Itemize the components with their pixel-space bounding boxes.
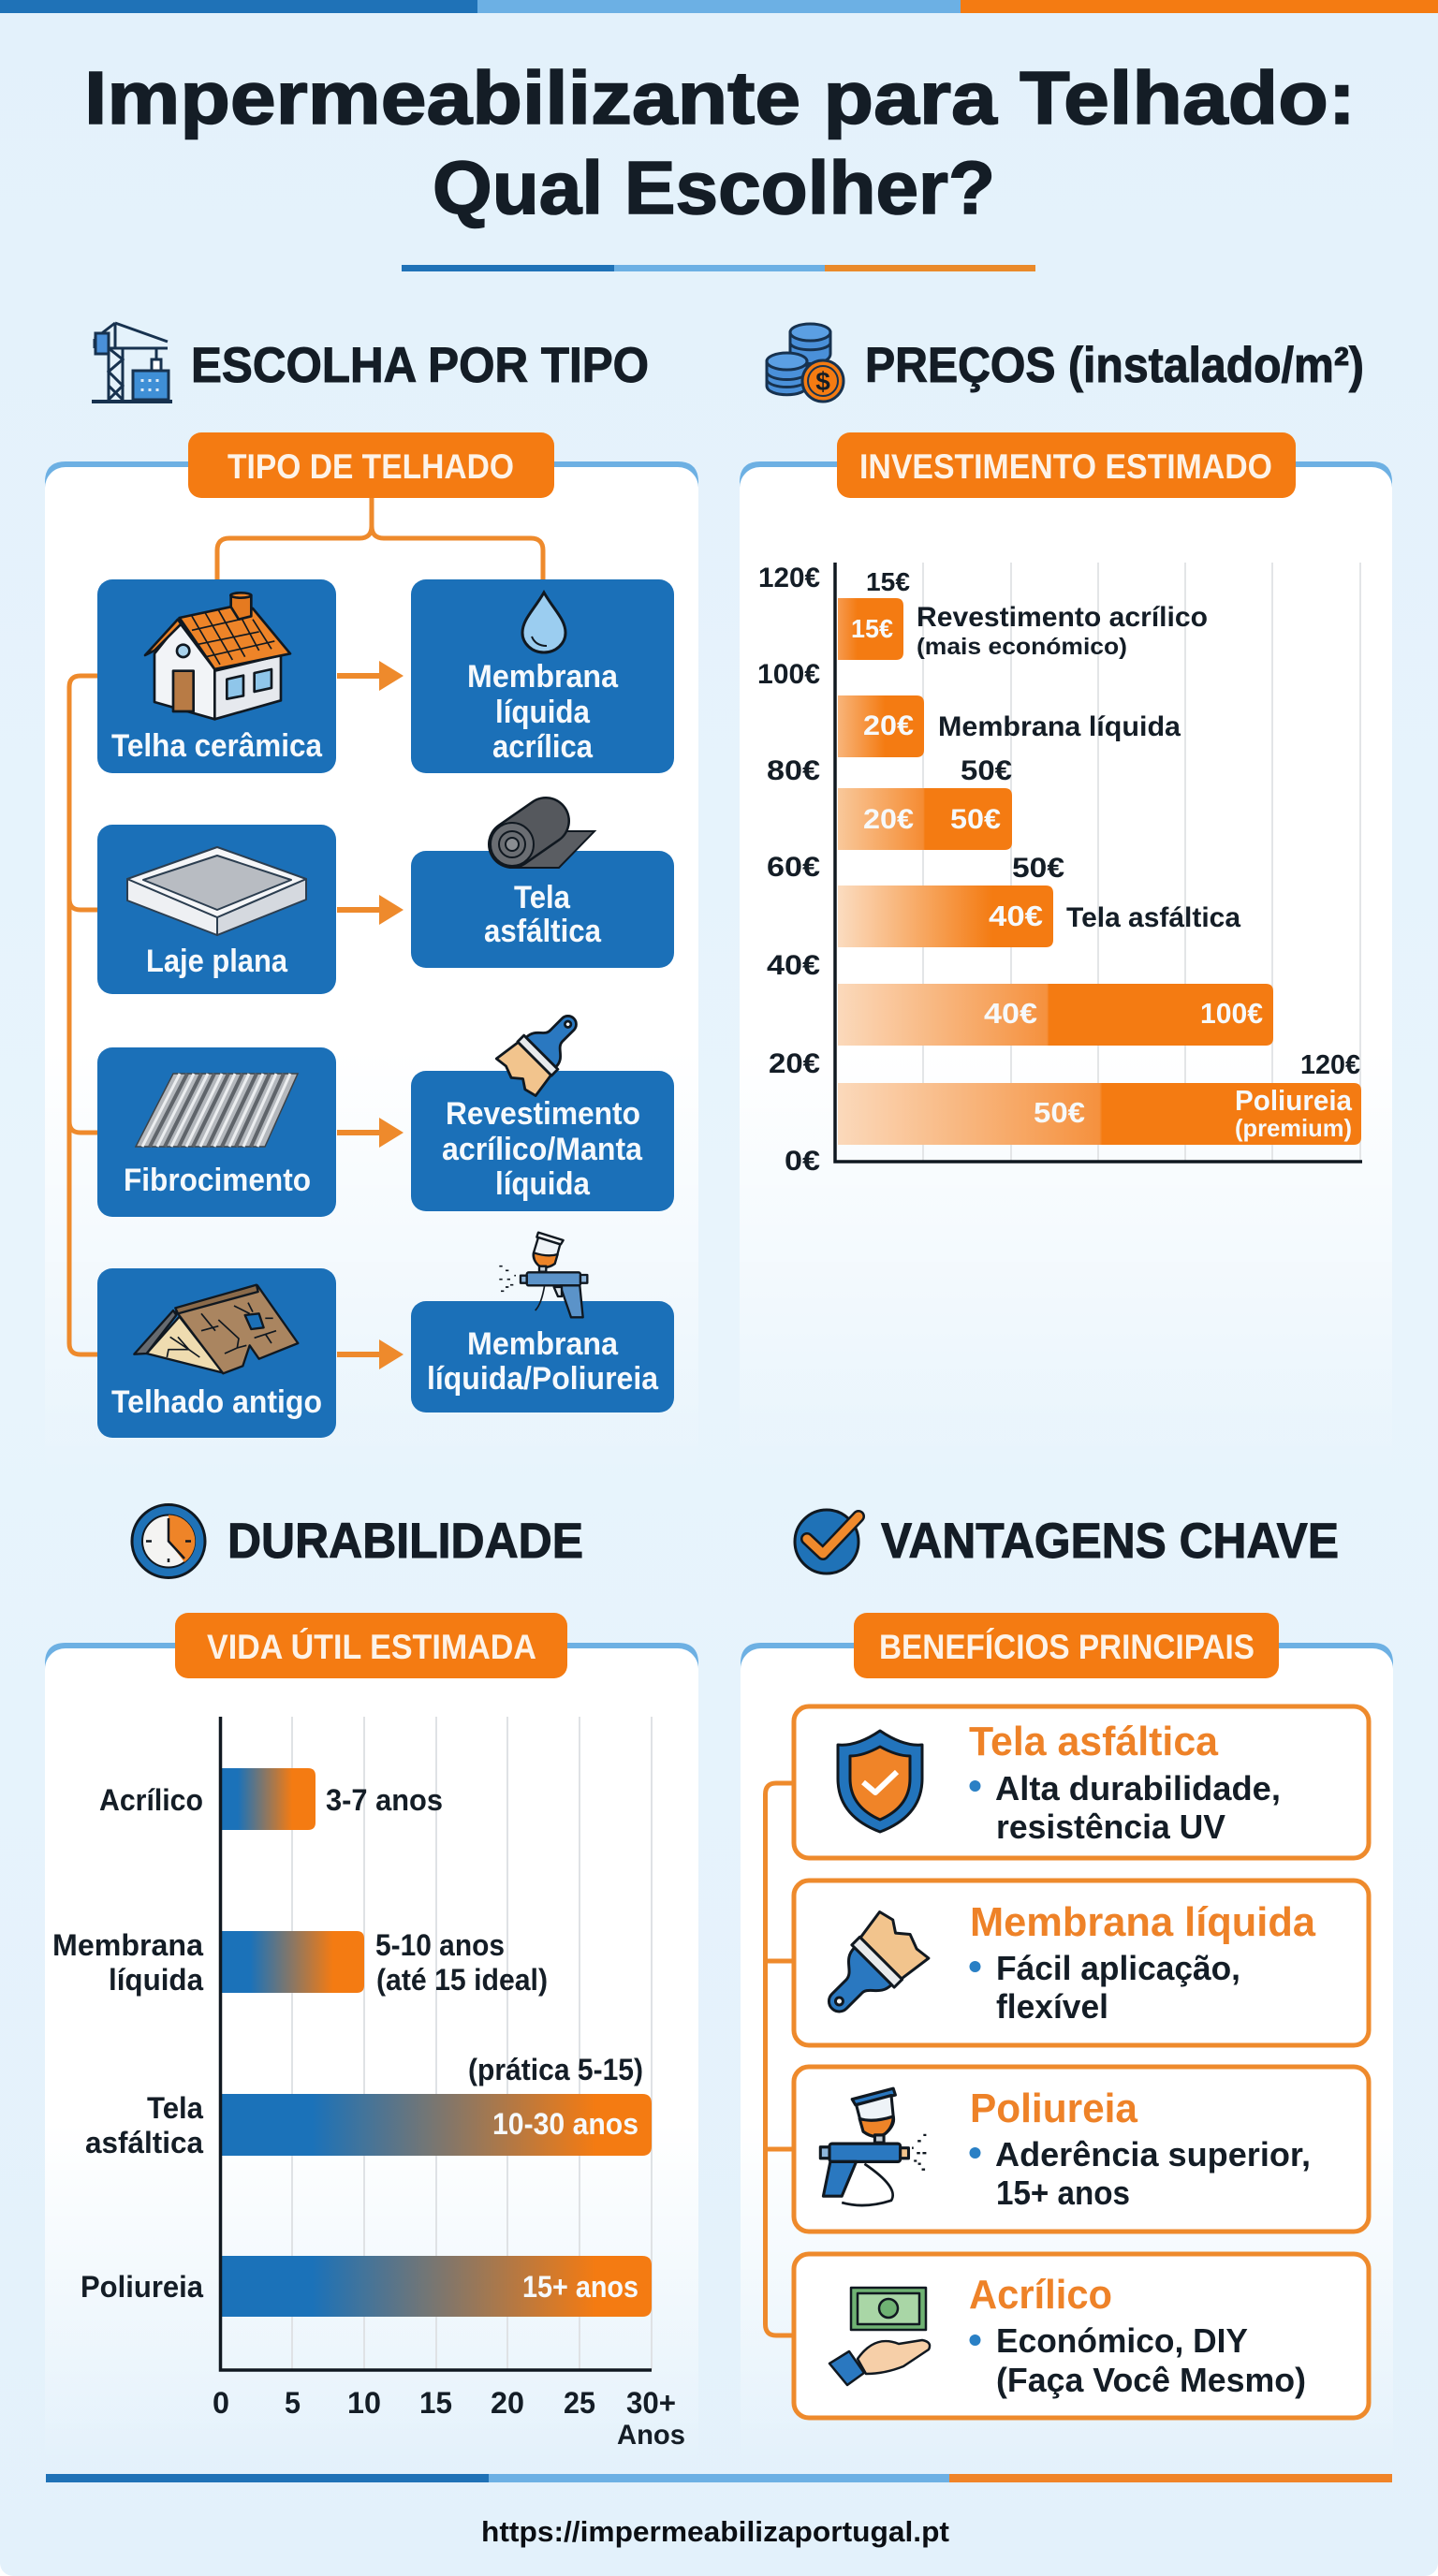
y axis labels: 80€: [767, 755, 820, 786]
icon: clock: [132, 1505, 205, 1578]
title: Impermeabilizante para Telhado:: [84, 56, 1356, 139]
heading text: ESCOLHA POR TIPO: [191, 338, 649, 393]
arrow: [337, 1118, 404, 1148]
card text: Membrana líquida: [970, 1899, 1316, 1945]
panel background: [45, 461, 698, 1473]
box: fibrocimento: Fibrocimento: [124, 1163, 311, 1198]
icon: brush: [808, 1908, 932, 2031]
bar: acrilico: 3-7 anos: [326, 1783, 443, 1817]
card text: [970, 1899, 1316, 2026]
x axis labels: 10: [347, 2386, 381, 2420]
icon: spray gun: [820, 2088, 926, 2205]
category labels: [52, 1783, 203, 2304]
card text: flexível: [996, 1987, 1108, 2026]
box: laje plana: Laje plana: [146, 944, 288, 979]
panel background: [741, 1643, 1393, 2467]
card text: Poliureia: [970, 2086, 1138, 2131]
bar: 20-50: [838, 788, 1012, 850]
card text: (Faça Você Mesmo): [996, 2361, 1306, 2399]
arrow: [337, 1339, 404, 1369]
card text: Aderência superior,: [995, 2135, 1311, 2174]
icon: coins: $: [815, 367, 830, 396]
title divider: [402, 265, 1035, 271]
bar: membrana liquida: (até 15 ideal): [376, 1963, 548, 1997]
data labels: 120€: [1300, 1050, 1360, 1080]
icon: house: [145, 593, 290, 719]
icon: water drop: [522, 593, 565, 652]
panel header pill: [175, 1613, 567, 1678]
box: membrana liquida acrilica: líquida: [495, 695, 591, 730]
card: poliureia: [794, 2067, 1369, 2232]
box: revestimento acrilico: Revestimento: [446, 1096, 640, 1132]
icon: crane: [92, 323, 172, 402]
box: telhado antigo: [97, 1268, 336, 1438]
box: telha ceramica: Telha cerâmica: [111, 728, 323, 764]
panel header pill: TIPO DE TELHADO: [227, 447, 514, 486]
bar: 40-100: 40€: [984, 997, 1037, 1030]
footer url: https://impermeabilizaportugal.pt: [481, 2515, 949, 2548]
card text: resistência UV: [996, 1808, 1225, 1846]
box: membrana liquida poliureia: [411, 1301, 674, 1412]
connector bracket: [766, 1783, 794, 2335]
heading text: VANTAGENS CHAVE: [881, 1514, 1339, 1569]
panel header pill: BENEFÍCIOS PRINCIPAIS: [879, 1628, 1255, 1666]
box: membrana liquida acrilica: Membrana: [467, 659, 619, 695]
data labels: Membrana líquida: [938, 711, 1181, 742]
bar: poliureia: [838, 1083, 1361, 1145]
card text: [969, 2272, 1306, 2399]
y axis labels: 0€: [785, 1146, 820, 1177]
x axis labels: [213, 2386, 685, 2451]
heading text: DURABILIDADE: [227, 1514, 583, 1569]
box: revestimento acrilico: acrílico/Manta: [442, 1132, 643, 1167]
y axis labels: 60€: [767, 852, 820, 883]
category labels: Acrílico: [99, 1783, 203, 1817]
bar: membrana liquida: 5-10 anos: [375, 1928, 505, 1962]
box: laje plana: [97, 825, 336, 994]
bar: poliureia: 50€: [1034, 1096, 1085, 1129]
card text: Fácil aplicação,: [996, 1949, 1240, 1987]
top colour bar: [0, 0, 1438, 13]
data labels: 15€: [866, 567, 910, 596]
icon: spray gun: [499, 1233, 587, 1317]
bar: 40-100: [838, 984, 1273, 1046]
card text: [970, 2086, 1311, 2212]
section heading: escolha por tipo: [92, 323, 649, 402]
panel: tipo de telhado: [45, 432, 698, 1473]
card: tela asfaltica: [794, 1706, 1369, 1858]
bar: 20-50: 50€: [950, 804, 1001, 835]
card text: 15+ anos: [996, 2174, 1130, 2212]
bar: poliureia: (premium): [1235, 1114, 1352, 1142]
card text: [969, 1719, 1281, 1846]
panel background: [45, 1643, 698, 2467]
x axis labels: 30+: [626, 2386, 676, 2420]
icon: shield: [838, 1731, 922, 1832]
box: membrana liquida acrilica: [411, 579, 674, 773]
y axis labels: 120€: [758, 563, 820, 593]
y axis labels: 40€: [767, 950, 820, 981]
price bar chart: [757, 563, 1362, 1177]
y axis labels: 20€: [769, 1048, 820, 1079]
category labels: líquida: [109, 1963, 203, 1997]
x axis labels: 15: [419, 2386, 452, 2420]
panel header pill: [188, 432, 554, 498]
bar: tela asfaltica: [222, 2053, 652, 2156]
section heading: durabilidade: [132, 1505, 583, 1578]
box: fibrocimento: [97, 1047, 336, 1217]
panel header pill: VIDA ÚTIL ESTIMADA: [207, 1627, 536, 1666]
bar: 40-100: 100€: [1200, 997, 1263, 1030]
chart axes: [221, 1717, 652, 2370]
bar: poliureia: 15+ anos: [522, 2270, 638, 2304]
data labels: [866, 567, 1360, 1080]
card text: Alta durabilidade,: [995, 1769, 1281, 1808]
title: [84, 56, 1356, 229]
title: Qual Escolher?: [433, 146, 995, 229]
x axis labels: 25: [564, 2386, 595, 2420]
bar: membrana liquida: [222, 1928, 548, 1997]
icon: paint brush: [494, 1000, 594, 1099]
bar: revestimento acrilico: 15€: [851, 614, 893, 643]
box: tela asfaltica: asfáltica: [484, 914, 602, 949]
icon: money in hand: [829, 2288, 930, 2385]
box: membrana liquida poliureia: Membrana: [467, 1326, 619, 1362]
box: tela asfaltica: [411, 851, 674, 968]
box: membrana liquida poliureia: líquida/Poliureia: [427, 1361, 659, 1397]
bar: membrana liquida: [838, 695, 924, 757]
card text: Acrílico: [969, 2272, 1112, 2318]
chart axes: [835, 563, 1362, 1162]
x axis labels: Anos: [617, 2420, 685, 2451]
data labels: Revestimento acrílico: [917, 602, 1208, 633]
box: tela asfaltica: Tela: [514, 880, 571, 915]
data labels: 50€: [1012, 853, 1064, 884]
arrow: [337, 661, 404, 691]
durability bar chart: [52, 1717, 685, 2451]
panel header pill: [854, 1613, 1279, 1678]
category labels: Poliureia: [81, 2270, 203, 2304]
y axis labels: [757, 563, 820, 1177]
panel header pill: INVESTIMENTO ESTIMADO: [859, 447, 1272, 486]
icon: check badge: [795, 1510, 858, 1573]
box: telha ceramica: [97, 579, 336, 773]
connectors: [69, 498, 543, 1354]
card: acrilico: [794, 2254, 1369, 2418]
section heading: precos: [767, 324, 1364, 402]
panel: vida util estimada: [45, 1613, 698, 2467]
icon: asphalt roll: [491, 821, 594, 868]
box: telhado antigo: Telhado antigo: [111, 1384, 322, 1420]
heading text: PREÇOS (instalado/m²): [865, 338, 1364, 393]
box: membrana liquida acrilica: acrílica: [492, 729, 594, 765]
category labels: Membrana: [52, 1928, 203, 1962]
card text: Económico, DIY: [996, 2321, 1248, 2360]
data labels: Tela asfáltica: [1066, 902, 1240, 933]
icon: coins: [767, 324, 844, 402]
bar: tela asfaltica: 40€: [989, 900, 1043, 932]
data labels: 50€: [961, 755, 1012, 786]
x axis labels: 5: [285, 2386, 301, 2420]
icon: flat slab: [127, 847, 306, 935]
bar: membrana liquida: 20€: [863, 710, 914, 741]
bar: tela asfaltica: 10-30 anos: [492, 2107, 638, 2141]
category labels: asfáltica: [85, 2126, 203, 2159]
box: revestimento acrilico: [411, 1071, 674, 1211]
panel: beneficios principais: [741, 1613, 1393, 2467]
card: membrana liquida: [794, 1881, 1369, 2045]
x axis labels: 20: [491, 2386, 524, 2420]
panel: investimento estimado: [740, 432, 1392, 1473]
bar: acrilico: [222, 1768, 443, 1830]
footer colour bar: [46, 2474, 1392, 2482]
icon: damaged roof: [134, 1285, 298, 1373]
arrow: [337, 895, 404, 925]
y axis labels: 100€: [757, 659, 820, 690]
card text: Tela asfáltica: [969, 1719, 1219, 1764]
bar: poliureia: [222, 2256, 652, 2317]
panel header pill: [837, 432, 1296, 498]
data labels: (mais económico): [917, 634, 1127, 660]
panel background: [740, 461, 1392, 1473]
bar: tela asfaltica: [838, 886, 1053, 947]
box: revestimento acrilico: líquida: [495, 1166, 591, 1202]
category labels: Tela: [147, 2091, 203, 2125]
bar: tela asfaltica: (prática 5-15): [468, 2053, 643, 2086]
bar: 20-50: 20€: [863, 804, 914, 835]
x axis labels: 0: [213, 2386, 229, 2420]
section heading: vantagens chave: [795, 1510, 1339, 1573]
bar: poliureia: Poliureia: [1235, 1084, 1353, 1117]
icon: corrugated sheet: [136, 1074, 298, 1147]
bar: revestimento acrilico: [838, 598, 903, 660]
